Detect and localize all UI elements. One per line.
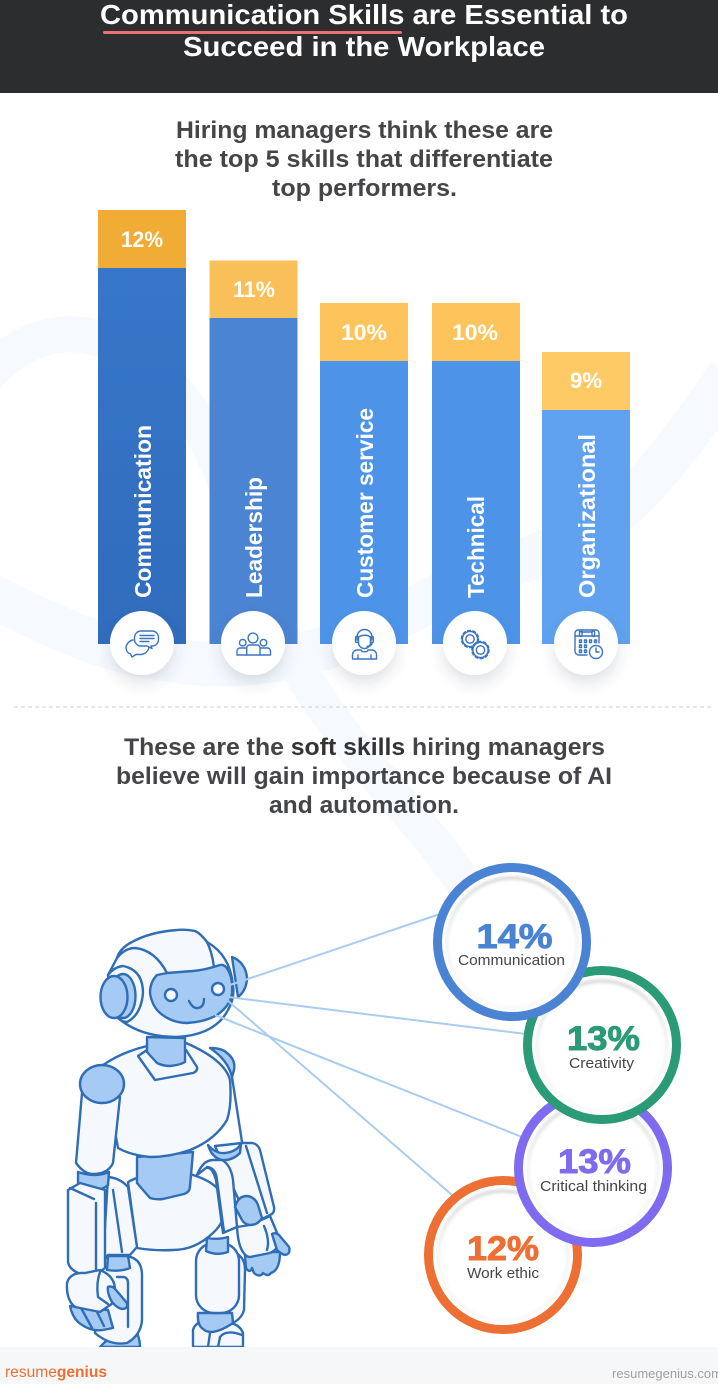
ring: Communication 14%: Communication [458, 952, 565, 969]
header band [0, 0, 718, 93]
divider [14, 706, 714, 708]
heading: soft skills: and automation. [269, 792, 459, 819]
icon: customer support agent [332, 611, 396, 675]
heading: top 5 skills: the top 5 skills that differentiate [175, 146, 553, 173]
heading: top 5 skills: Hiring managers think these are [176, 117, 553, 144]
robot head [100, 930, 247, 1037]
ring: Critical thinking 13%: Critical thinking [540, 1178, 647, 1195]
ring: Creativity 13%: 13% [567, 1020, 640, 1058]
bar: Leadership 11%: 11% [233, 277, 275, 302]
bar: Technical 10%: Technical [463, 496, 489, 598]
robot back arm and legs [95, 1143, 274, 1347]
icon: calendar and clock [554, 611, 618, 675]
ring: Work ethic 12%: 12% [467, 1230, 539, 1268]
heading: top 5 skills [175, 117, 553, 202]
ring: Communication 14% [438, 868, 586, 1016]
robot left arm [67, 1065, 137, 1330]
footer [0, 1347, 718, 1384]
title: Succeed in the Workplace [183, 31, 545, 62]
bar: Communication 12%: Communication [130, 425, 156, 598]
robot eyes and mouth [165, 983, 224, 1008]
icon: speech bubbles [110, 611, 174, 675]
ring: Creativity 13%: Creativity [569, 1055, 635, 1072]
icon: gears [443, 611, 507, 675]
background swoosh [0, 334, 718, 1075]
heading: soft skills: These are the soft skills hiring managers [124, 734, 605, 761]
title [100, 0, 628, 62]
ring: Critical thinking 13% [518, 1094, 668, 1242]
bar: Leadership 11% [210, 260, 298, 644]
connector lines [215, 914, 526, 1195]
ring: Communication 14%: 14% [476, 918, 552, 956]
robot illustration [67, 930, 290, 1347]
bar: Customer service 10% [320, 303, 408, 644]
bar: Customer service 10%: Customer service [352, 408, 378, 598]
robot legs and hips [128, 1152, 245, 1347]
title underline [103, 31, 402, 34]
bar: Leadership 11%: Leadership [241, 477, 267, 598]
bar: Customer service 10%: 10% [341, 320, 387, 345]
ring: Creativity 13% [528, 970, 676, 1120]
ring: Work ethic 12%: Work ethic [467, 1265, 540, 1282]
robot torso [103, 1037, 242, 1157]
ring: Critical thinking 13%: 13% [558, 1143, 631, 1181]
bar: Technical 10%: 10% [452, 320, 498, 345]
heading: soft skills: believe will gain importance because of AI [116, 763, 612, 790]
bar: Communication 12% [98, 210, 186, 644]
bar: Technical 10% [432, 303, 520, 644]
ring: Work ethic 12% [428, 1180, 578, 1330]
heading: top 5 skills: top performers. [272, 175, 457, 202]
footer logo: resumegenius [5, 1364, 107, 1381]
icon: team [221, 611, 285, 675]
bar: Communication 12%: 12% [121, 227, 163, 252]
robot right hand [235, 1196, 290, 1276]
bar: Organizational 9%: Organizational [574, 434, 600, 598]
bar chart: top 5 skills [98, 210, 630, 644]
heading: soft skills [116, 734, 612, 819]
bar: Organizational 9%: 9% [570, 368, 602, 393]
bar: Organizational 9% [542, 352, 630, 644]
